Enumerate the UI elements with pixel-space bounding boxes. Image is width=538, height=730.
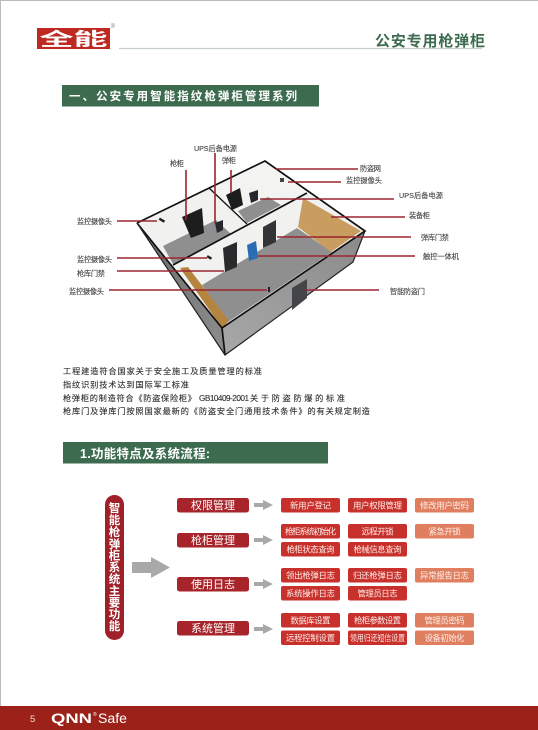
callout labels: 智能防盗门 (390, 287, 425, 296)
vertical title pill: 要 (109, 596, 120, 610)
vertical title pill: 功 (109, 607, 120, 621)
callout labels: 弹库门禁 (421, 233, 449, 242)
vertical title pill: 能 (109, 513, 121, 527)
vertical title pill (105, 495, 124, 640)
small arrows (254, 500, 273, 634)
callout labels (69, 144, 460, 296)
sub-function buttons: 管理员密码 (424, 616, 464, 626)
vertical title pill: 系 (109, 560, 120, 574)
sub-function buttons: 紧急开锁 (428, 526, 461, 536)
sub-function buttons: 枪柜系统初始化 (285, 526, 337, 536)
vertical title pill: 能 (109, 619, 121, 633)
sub-function buttons: 系统操作日志 (286, 588, 335, 598)
category: 枪柜管理: 枪柜管理 (191, 533, 235, 547)
sub-function buttons: 归还枪弹日志 (353, 570, 402, 580)
category: 使用日志: 使用日志 (191, 578, 235, 591)
description text: 工程建造符合国家关于安全施工及质量管理的标准 (63, 366, 262, 376)
callout labels: 监控摄像头 (77, 217, 112, 226)
logo: 全能: ® (111, 23, 116, 30)
vertical title pill: 统 (109, 572, 121, 586)
description text: 枪库门及弹库门按照国家最新的《防盗安全门通用技术条件》的有关规定制造 (63, 406, 370, 416)
sub-function buttons: 管理员日志 (358, 588, 398, 598)
footer bar: 5 (30, 714, 35, 725)
callout lines (109, 153, 415, 290)
callout labels: 枪柜 (170, 159, 184, 168)
vertical title pill: 主 (109, 584, 120, 598)
callout labels: UPS后备电源 (194, 144, 237, 153)
category: 系统管理: 系统管理 (191, 621, 235, 635)
sub-function buttons: 用户权限管理 (353, 500, 403, 510)
sub-function buttons: 枪械信息查询 (354, 544, 402, 554)
sub-function buttons: 远程控制设置 (286, 633, 335, 643)
section heading 2: 1.功能特点及系统流程: (80, 446, 210, 461)
page title: 公安专用枪弹柜 (375, 32, 485, 50)
vertical title pill: 弹 (109, 537, 121, 551)
section heading 1: 一、公安专用智能指纹枪弹柜管理系列 (69, 89, 297, 103)
section heading 1 (62, 85, 319, 106)
category: 使用日志 (177, 577, 249, 592)
sub-function buttons: 领用归还短信设置 (350, 633, 405, 643)
description text: 枪弹柜的制造符合《防盗保险柜》 (63, 393, 196, 403)
large arrow (132, 557, 170, 578)
callout labels: UPS后备电源 (399, 191, 443, 200)
sub-function buttons: 领出枪弹日志 (286, 570, 335, 580)
category: 权限管理 (177, 498, 249, 512)
callout labels: 枪库门禁 (77, 269, 105, 278)
sub-function buttons: 异常报告日志 (420, 570, 469, 580)
callout labels: 监控摄像头 (69, 287, 104, 296)
exterior walls (137, 223, 365, 355)
building diagram (69, 144, 460, 355)
sub-function buttons: 修改用户密码 (420, 500, 469, 510)
description text (63, 366, 370, 416)
footer bar: ® (93, 711, 97, 718)
description text: 关于防盗防爆的标准 (250, 393, 345, 403)
flow chart (105, 495, 474, 645)
sub-function buttons: 数据库设置 (290, 616, 330, 626)
callout labels: 监控摄像头 (346, 176, 382, 185)
section heading 2 (63, 442, 328, 464)
callout labels: 监控摄像头 (77, 255, 112, 264)
logo: 全能: 全能 (40, 28, 108, 50)
category: 系统管理 (177, 621, 249, 636)
vertical title pill: 柜 (109, 548, 121, 562)
callout labels: 触控一体机 (423, 252, 460, 261)
footer bar: Safe (98, 711, 127, 726)
category: 枪柜管理 (177, 533, 249, 548)
sub-function buttons (281, 498, 474, 645)
description text: 指纹识别技术达到国际军工标准 (63, 380, 189, 390)
footer bar: QNN (51, 710, 92, 726)
vertical title pill: 智 (109, 501, 120, 515)
sub-function buttons: 设备初始化 (424, 633, 465, 643)
category: 权限管理: 权限管理 (191, 498, 235, 512)
room floors and walls (137, 161, 365, 355)
vertical title pill: 枪 (109, 525, 121, 539)
callout labels: 装备柜 (409, 211, 430, 220)
sub-function buttons: 新用户登记 (290, 500, 332, 510)
equipment: cabinets, doors, kiosk (159, 178, 307, 310)
callout labels: 防盗网 (360, 164, 381, 173)
sub-function buttons: 远程开锁 (362, 526, 394, 536)
footer bar (0, 706, 538, 730)
description text: GB10409-2001 (199, 394, 249, 403)
sub-function buttons: 枪柜参数设置 (354, 616, 401, 626)
sub-function buttons: 枪柜状态查询 (286, 544, 334, 554)
callout labels: 弹柜 (222, 156, 236, 165)
logo: 全能 (37, 23, 116, 50)
